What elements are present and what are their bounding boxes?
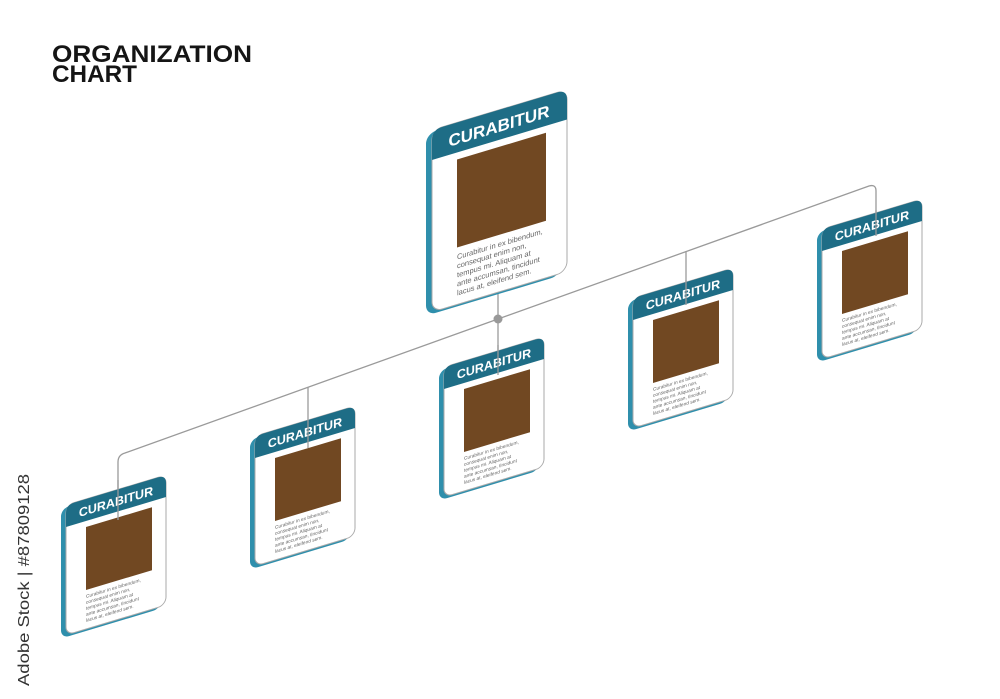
card: top: tempus mi. Aliquam at bbox=[457, 248, 532, 279]
card: level2 #2 bbox=[250, 406, 355, 570]
card: level2 #4: Curabitur in ex bibendum, bbox=[653, 371, 708, 393]
card: top: consequat enim non, bbox=[457, 241, 527, 270]
card: level2 #5: consequat enim non, bbox=[842, 311, 886, 330]
card: level2 #4: ante accumsan, tincidunt bbox=[653, 389, 707, 411]
card: level2 #2: Curabitur in ex bibendum, bbox=[275, 509, 330, 531]
watermark side text: Adobe Stock | #87809128 bbox=[16, 474, 33, 686]
card: level2 #4: consequat enim non, bbox=[653, 380, 697, 399]
card: level2 #3: CURABITUR bbox=[457, 345, 531, 382]
card: level2 #2: consequat enim non, bbox=[275, 518, 319, 537]
card: level2 #5: CURABITUR bbox=[835, 207, 909, 244]
card: level2 #2: tempus mi. Aliquam at bbox=[275, 523, 323, 543]
card: level2 #4: CURABITUR bbox=[646, 276, 720, 313]
card: level2 #4: tempus mi. Aliquam at bbox=[653, 385, 701, 405]
card: level2 #1: consequat enim non, bbox=[86, 587, 130, 606]
card: top: CURABITUR bbox=[449, 101, 550, 151]
card: level2 #5: Curabitur in ex bibendum, bbox=[842, 302, 897, 324]
card: level2 #2: ante accumsan, tincidunt bbox=[275, 527, 329, 549]
connector lines bbox=[118, 186, 876, 520]
card: level2 #3: tempus mi. Aliquam at bbox=[464, 454, 512, 474]
card: level2 #1: CURABITUR bbox=[79, 483, 153, 520]
card: level2 #3 bbox=[439, 337, 544, 501]
card: level2 #3: consequat enim non, bbox=[464, 449, 508, 468]
card: level2 #2: CURABITUR bbox=[268, 414, 342, 451]
connector overlays into headers bbox=[118, 210, 876, 520]
card: level2 #5 bbox=[817, 199, 922, 363]
card: top: ante accumsan, tincidunt bbox=[457, 255, 541, 288]
card: level2 #1 bbox=[61, 475, 166, 639]
card: level2 #4 bbox=[628, 268, 733, 432]
card: level2 #1: Curabitur in ex bibendum, bbox=[86, 578, 141, 600]
title: ORGANIZATION bbox=[52, 41, 252, 68]
card: level2 #3: lacus at, eleifend sem. bbox=[464, 466, 512, 486]
card: level2 #1: tempus mi. Aliquam at bbox=[86, 592, 134, 612]
title bbox=[52, 41, 252, 88]
title: CHART bbox=[52, 61, 137, 88]
card: level2 #1: lacus at, eleifend sem. bbox=[86, 604, 134, 624]
card: level2 #3: ante accumsan, tincidunt bbox=[464, 458, 518, 480]
card: level2 #4: lacus at, eleifend sem. bbox=[653, 397, 701, 417]
card: top: Curabitur in ex bibendum, bbox=[457, 227, 543, 261]
card: top bbox=[426, 89, 567, 316]
junction dot bbox=[494, 314, 502, 324]
card: top: lacus at, eleifend sem. bbox=[457, 266, 532, 297]
card: level2 #5: lacus at, eleifend sem. bbox=[842, 328, 890, 348]
card: level2 #2: lacus at, eleifend sem. bbox=[275, 535, 323, 555]
card: level2 #5: tempus mi. Aliquam at bbox=[842, 316, 890, 336]
card: level2 #3: Curabitur in ex bibendum, bbox=[464, 440, 519, 462]
card: level2 #5: ante accumsan, tincidunt bbox=[842, 320, 896, 342]
card: level2 #1: ante accumsan, tincidunt bbox=[86, 596, 140, 618]
